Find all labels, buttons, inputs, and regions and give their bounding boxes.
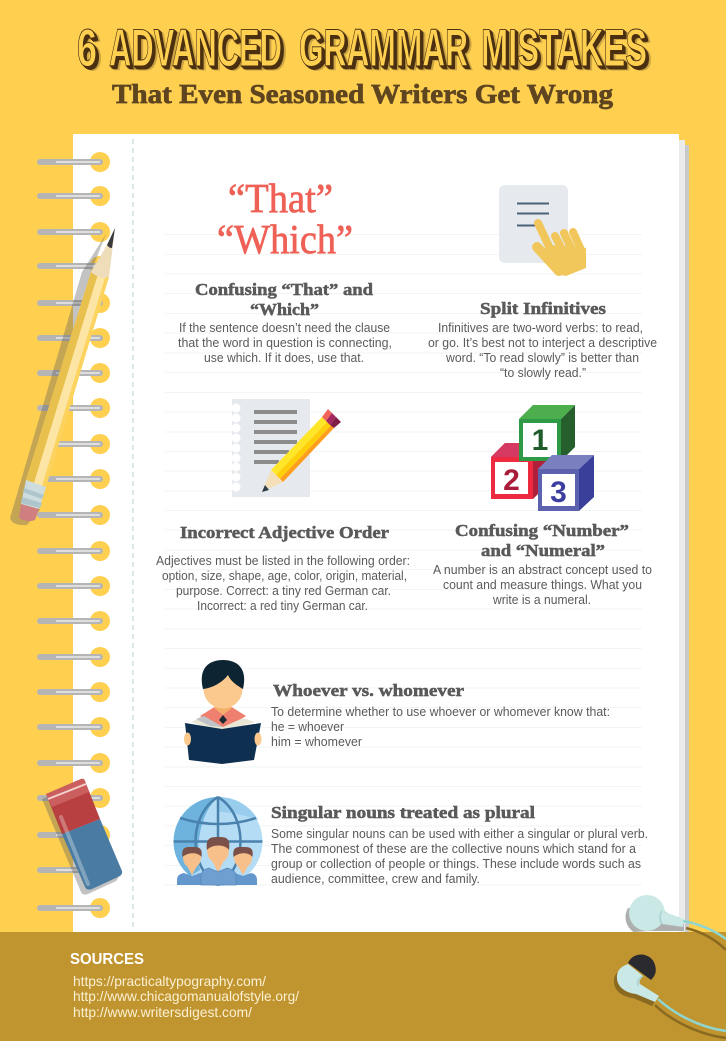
text block: The commonest of these are the collective nouns which stand for a [271, 841, 637, 856]
icon: globe with people [174, 797, 262, 886]
title: 6 [77, 19, 97, 78]
text block: count and measure things. What you [443, 577, 642, 592]
panel: confusing number and numeral [433, 405, 652, 607]
icon: That Which quotes: “Which” [217, 216, 353, 262]
text block: or go. It’s best not to interject a descriptive [428, 335, 657, 350]
text block: Infinitives are two-word verbs: to read, [438, 320, 643, 335]
block 3: 3 [550, 476, 567, 509]
source links: http://www.writersdigest.com/ [73, 1004, 252, 1020]
text block [178, 320, 392, 365]
text block: To determine whether to use whoever or whomever know that: [271, 704, 610, 719]
icon: notepad and pencil [232, 399, 341, 497]
heading [455, 521, 629, 560]
icon: earbuds [614, 895, 726, 1038]
heading: Singular nouns treated as plural [271, 803, 535, 822]
spiral rings [40, 152, 110, 918]
panel: sources [0, 932, 726, 1041]
block 2: 2 [503, 464, 520, 497]
sources heading: SOURCES [70, 951, 144, 968]
heading: Incorrect Adjective Order [180, 523, 389, 542]
title [77, 19, 647, 78]
text block [271, 826, 648, 886]
text block: purpose. Correct: a tiny red German car. [176, 583, 391, 598]
text block: Incorrect: a red tiny German car. [197, 598, 368, 613]
icon: eraser [42, 779, 122, 895]
panel: confusing that and which [178, 175, 392, 365]
panel: singular nouns treated as plural [174, 797, 648, 886]
text block: use which. If it does, use that. [204, 350, 364, 365]
icon: hand on document [499, 185, 586, 276]
icon: numbered blocks [491, 405, 594, 511]
heading: and “Numeral” [481, 541, 605, 560]
text block: Adjectives must be listed in the following order: [156, 553, 410, 568]
text block: If the sentence doesn’t need the clause [179, 320, 390, 335]
text block: word. “To read slowly” is better than [445, 350, 639, 365]
source links [73, 973, 299, 1020]
text block: that the word in question is connecting, [178, 335, 392, 350]
text block [156, 553, 410, 613]
panel: split infinitives [428, 185, 657, 380]
text block: audience, committee, crew and family. [271, 871, 480, 886]
text block [433, 562, 652, 607]
notebook page stack [73, 134, 689, 932]
icon: pencil [10, 228, 115, 525]
text block: group or collection of people or things. These include words such as [271, 856, 641, 871]
text block: option, size, shape, age, color, origin, material, [162, 568, 407, 583]
icon: That Which quotes: “That” [228, 175, 333, 221]
heading: Whoever vs. whomever [273, 681, 465, 700]
text block: Some singular nouns can be used with either a singular or plural verb. [271, 826, 648, 841]
icon: That Which quotes [217, 175, 353, 262]
text block [271, 704, 610, 749]
text block [428, 320, 657, 380]
icon: person reading [184, 660, 262, 764]
heading: Split Infinitives [480, 299, 606, 318]
text block: “to slowly read.” [500, 365, 586, 380]
source links: http://www.chicagomanualofstyle.org/ [73, 988, 299, 1004]
title: GRAMMAR [299, 19, 468, 78]
heading [195, 280, 374, 319]
text block: he = whoever [271, 719, 345, 734]
heading: “Which” [250, 300, 319, 319]
text block: A number is an abstract concept used to [433, 562, 652, 577]
source links: https://practicaltypography.com/ [73, 973, 266, 989]
title: ADVANCED [109, 19, 282, 78]
text block: him = whomever [271, 734, 363, 749]
panel: whoever vs whomever [184, 660, 610, 764]
heading: Confusing “That” and [195, 280, 374, 299]
text block: write is a numeral. [492, 592, 591, 607]
subtitle: That Even Seasoned Writers Get Wrong [112, 79, 614, 109]
panel: incorrect adjective order [156, 399, 410, 613]
block 1: 1 [532, 424, 548, 457]
heading: Confusing “Number” [455, 521, 629, 540]
